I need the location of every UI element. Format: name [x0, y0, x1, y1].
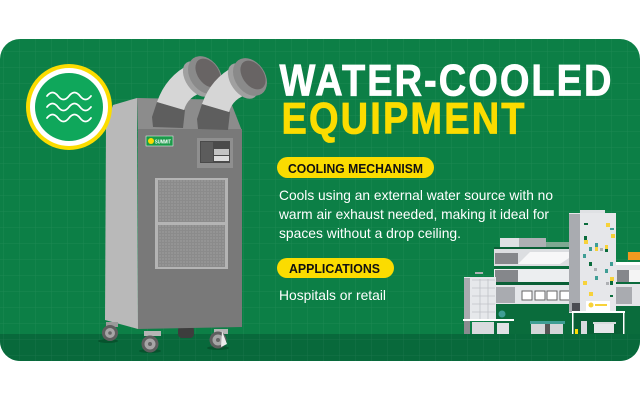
heading pill: applications: [277, 258, 394, 278]
hose: left: [152, 50, 229, 128]
text block: cooling description: warm air exhaust needed, making it ideal for: [278, 206, 549, 222]
text block: cooling description: [278, 187, 553, 241]
building: tall tower: [569, 210, 616, 313]
title line: yellow: EQUIPMENT: [282, 94, 524, 143]
text block: cooling description: Cools using an external water source with no: [279, 187, 553, 203]
heading pill: applications: APPLICATIONS: [289, 261, 380, 276]
equipment: portable water-cooled unit: [98, 50, 274, 353]
text block: applications description: Hospitals or retail: [279, 287, 386, 303]
building: entrance shop: [530, 321, 565, 334]
icon: water waves badge: [26, 64, 112, 150]
logo badge: SUMMIT: [155, 140, 171, 146]
air filter grille: [155, 178, 228, 269]
illustration: hospital buildings: [463, 210, 640, 334]
back foot: [178, 326, 194, 338]
unit side panel: [105, 98, 138, 329]
title line: white: WATER-COOLED: [280, 56, 612, 105]
caster wheels: [98, 322, 229, 353]
logo badge: [146, 136, 173, 146]
building: lobby: [572, 311, 625, 334]
building: small left tower: [463, 272, 514, 334]
building: right wing: [616, 252, 640, 334]
unit front panel: [138, 129, 242, 329]
hose: right: [197, 52, 274, 130]
heading pill: cooling mechanism: COOLING MECHANISM: [288, 161, 423, 176]
building: main block: [494, 238, 574, 334]
control panel: [197, 138, 233, 168]
title: [280, 56, 612, 143]
unit top slope: [137, 98, 242, 131]
text block: cooling description: spaces without a drop ceiling.: [279, 225, 461, 241]
heading pill: cooling mechanism: [277, 157, 434, 178]
